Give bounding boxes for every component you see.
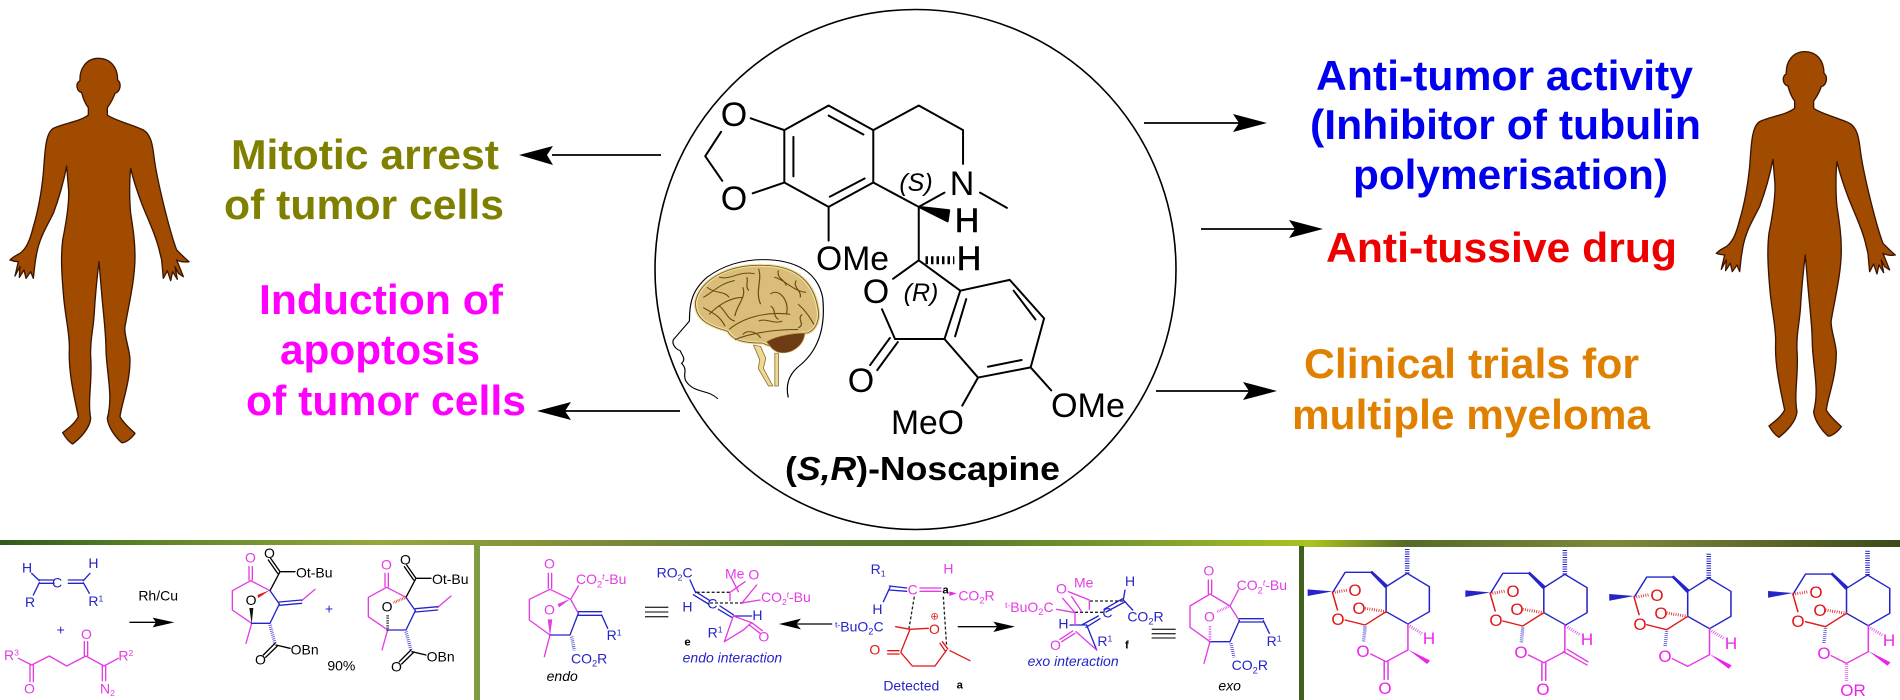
analogue 2: O — [1510, 600, 1524, 619]
allene reactant: R — [25, 594, 35, 610]
text: clinical trials: Clinical trials for — [1304, 340, 1639, 387]
diazo ketone reactant: 3 — [14, 647, 19, 657]
panel: endo exo mechanism — [480, 546, 1299, 700]
endo transition state e: C — [707, 596, 717, 612]
endo transition state e: -Bu — [789, 589, 811, 605]
text: mitotic arrest: Mitotic arrest — [231, 131, 499, 178]
text: anti-tussive drug: Anti-tussive drug — [1326, 224, 1677, 271]
product 2: O — [400, 552, 411, 568]
intermediate a: ⊕ — [930, 611, 939, 622]
molecule labels: MeO — [891, 404, 964, 442]
analogue 1: O — [1352, 599, 1366, 618]
CO2R, arrow to exo and label a — [949, 588, 1015, 692]
molecule labels: O — [721, 96, 747, 134]
intermediate a: Detected — [883, 678, 939, 694]
molecule labels: N — [950, 165, 974, 203]
endo transition state e: Me — [725, 566, 745, 582]
analogue 2: H — [1581, 630, 1593, 649]
endo product: 2 — [592, 659, 597, 669]
text: anti-tumor activity: Anti-tumor activity — [1316, 52, 1694, 99]
CO2R, arrow to exo and label a: 2 — [979, 596, 985, 606]
endo product: t — [602, 571, 605, 581]
exo product: R — [1267, 633, 1277, 649]
molecule labels: O — [848, 362, 874, 400]
molecule labels: OMe — [816, 240, 889, 278]
product 1: O — [255, 652, 266, 668]
allene reactant: C — [52, 574, 62, 590]
plus and yield: 90% — [327, 657, 355, 673]
exo transition state f — [1005, 573, 1176, 669]
arrow: to anti-tussive — [1201, 220, 1323, 238]
exo transition state f: 1 — [1107, 633, 1112, 643]
exo product: -Bu — [1265, 577, 1287, 593]
molecule labels: (S) — [899, 169, 933, 197]
analogue 1: O — [1356, 642, 1370, 661]
text: anti-tumor activity: (Inhibitor of tubulin — [1310, 101, 1701, 148]
product 1: O — [246, 592, 257, 608]
analogue 4: O — [1809, 583, 1823, 602]
diazo ketone reactant: 2 — [110, 688, 115, 698]
panel: background green strip — [0, 540, 1900, 700]
endo product: endo — [547, 668, 578, 684]
exo product: CO — [1232, 657, 1253, 673]
panel: allene reaction — [0, 545, 474, 700]
exo transition state f: R — [1154, 608, 1164, 624]
product 1: OBn — [291, 642, 319, 658]
endo transition state e: H — [682, 598, 692, 614]
endo transition state e — [657, 564, 811, 665]
arrow: to apoptosis — [537, 402, 680, 420]
endo product: O — [544, 601, 555, 617]
text: induction of apoptosis: of tumor cells — [246, 377, 526, 424]
diazo ketone reactant: O — [24, 680, 35, 696]
exo product — [1190, 562, 1287, 694]
endo product: 2 — [597, 579, 602, 589]
plus and yield — [325, 600, 355, 673]
allene reactant: R — [88, 593, 98, 609]
icon: head with brain — [673, 260, 823, 399]
exo transition state f: t- — [1005, 600, 1010, 610]
endo product: R — [597, 650, 607, 666]
exo product: O — [1203, 562, 1214, 578]
arrow to endo — [779, 619, 832, 629]
analogue 4: H — [1883, 631, 1895, 650]
exo transition state f: C — [1043, 599, 1054, 615]
reaction arrow Rh/Cu — [130, 588, 178, 627]
endo transition state e: CO — [761, 589, 782, 605]
endo transition state e: RO — [657, 564, 678, 580]
text: mitotic arrest — [224, 131, 504, 228]
endo product: R — [607, 627, 617, 643]
product 2: O — [391, 658, 402, 674]
molecule labels — [721, 96, 1125, 442]
text: mitotic arrest: of tumor cells — [224, 181, 504, 228]
analogue 2 — [1465, 549, 1593, 699]
exo transition state f: 2 — [1148, 616, 1154, 626]
allene reactant: 1 — [98, 593, 103, 603]
intermediate a: H — [872, 601, 882, 617]
CO2R, arrow to exo and label a: a — [957, 680, 964, 692]
exo product: t — [1263, 577, 1266, 587]
exo transition state f: R — [1097, 633, 1107, 649]
analogue 2: O — [1489, 611, 1503, 630]
molecule labels: O — [863, 273, 889, 311]
analogue 1: O — [1348, 581, 1362, 600]
analogue 3: H — [1725, 634, 1737, 653]
analogue 2: O — [1514, 643, 1528, 662]
analogue 1: O — [1331, 610, 1345, 629]
endo transition state e: endo interaction — [683, 649, 782, 665]
exo product: exo — [1218, 678, 1241, 694]
analogue 3: O — [1633, 615, 1647, 634]
molecule labels: H — [955, 202, 979, 240]
exo product: CO — [1237, 577, 1258, 593]
exo product: 1 — [1277, 633, 1282, 643]
text: anti-tumor activity: polymerisation) — [1353, 151, 1668, 198]
analogue 3: O — [1650, 586, 1664, 605]
product 2 — [368, 552, 469, 674]
exo transition state f: exo interaction — [1028, 653, 1119, 669]
product 1: O — [264, 545, 275, 561]
product 1: Ot-Bu — [296, 564, 333, 580]
endo transition state e: e — [684, 636, 691, 648]
exo transition state f: O — [1050, 637, 1061, 653]
exo transition state f: 2 — [1038, 607, 1043, 617]
product 1: O — [245, 550, 256, 566]
arrow: to anti-tumor — [1144, 114, 1267, 132]
diazo ketone reactant: 2 — [128, 648, 133, 658]
analogue 1: H — [1423, 629, 1435, 648]
allene reactant: + — [57, 621, 65, 637]
intermediate a: 2 — [868, 626, 873, 636]
endo transition state e: O — [748, 566, 759, 582]
molecule labels: (R) — [904, 279, 938, 307]
endo product — [529, 555, 668, 684]
exo transition state f: O — [1056, 580, 1067, 596]
exo transition state f: H — [1125, 573, 1135, 589]
analogue 3 — [1609, 553, 1737, 669]
intermediate a: R — [871, 561, 881, 577]
analogue 1 — [1308, 548, 1435, 698]
endo transition state e: H — [752, 607, 762, 623]
exo product: O — [1204, 608, 1215, 624]
allene reactant — [22, 555, 103, 637]
analogue 4: O — [1791, 612, 1805, 631]
arrow: to mitotic arrest — [519, 146, 661, 165]
text: clinical trials: multiple myeloma — [1292, 391, 1651, 438]
product 2: OBn — [427, 648, 455, 664]
endo product: O — [544, 555, 555, 571]
exo transition state f: BuO — [1010, 599, 1038, 615]
molecule labels: OMe — [1051, 387, 1125, 425]
molecule labels: O — [721, 180, 747, 218]
product 2: O — [381, 556, 392, 572]
analogue 4: O — [1813, 601, 1827, 620]
intermediate a: O — [929, 621, 940, 637]
exo product: 2 — [1253, 665, 1258, 675]
exo product: R — [1258, 657, 1268, 673]
product 2: Ot-Bu — [432, 571, 469, 587]
endo product: CO — [576, 571, 597, 587]
endo transition state e: R — [708, 624, 718, 640]
arrow: to clinical trials — [1156, 382, 1277, 400]
exo transition state f: CO — [1127, 608, 1148, 624]
diazo ketone reactant: O — [81, 626, 92, 642]
endo product: CO — [571, 650, 592, 666]
text: induction of apoptosis: apoptosis — [280, 326, 480, 373]
intermediate a: C — [873, 618, 884, 634]
intermediate a: 1 — [881, 569, 886, 579]
endo product: 1 — [617, 627, 622, 637]
analogue 4 — [1768, 550, 1895, 700]
exo transition state f: H — [1058, 616, 1068, 632]
diazo ketone reactant: R — [4, 647, 14, 663]
reaction arrow Rh/Cu: Rh/Cu — [138, 588, 178, 604]
intermediate a: a — [942, 584, 949, 596]
product 2: O — [382, 599, 393, 615]
text: induction of apoptosis: Induction of — [259, 276, 504, 323]
title: (S,R)-Noscapine: (S,R)-Noscapine — [785, 451, 1060, 488]
text: clinical trials — [1292, 340, 1651, 438]
product 1 — [232, 545, 333, 668]
endo transition state e: 2 — [678, 572, 683, 582]
exo transition state f: C — [1102, 604, 1112, 620]
endo transition state e: C — [682, 564, 693, 580]
endo transition state e: 1 — [718, 625, 723, 635]
CO2R, arrow to exo and label a: R — [985, 588, 995, 604]
exo transition state f: f — [1125, 640, 1129, 652]
analogue 4: O — [1817, 644, 1831, 663]
endo transition state e: 2 — [782, 597, 787, 607]
text: anti-tumor activity — [1310, 52, 1701, 198]
text: induction of apoptosis — [246, 276, 526, 424]
cerebellum — [767, 333, 805, 353]
intermediate a: t- — [835, 619, 840, 629]
brain stem — [753, 345, 778, 386]
icon: human figure left — [10, 58, 189, 444]
molecule labels: H — [957, 240, 981, 278]
icon: human figure right — [1716, 52, 1895, 437]
endo product: -Bu — [605, 571, 626, 587]
panel: central circle — [655, 10, 1176, 530]
allene reactant: H — [22, 560, 32, 576]
exo product: 2 — [1258, 585, 1263, 595]
analogue 1: O — [1378, 679, 1392, 698]
analogue 2: O — [1536, 680, 1550, 699]
endo transition state e: t — [787, 591, 790, 600]
exo transition state f: Me — [1074, 574, 1094, 590]
intermediate a: C — [908, 582, 918, 598]
analogue 3: O — [1658, 647, 1672, 666]
panel: artemisinin analogues — [1304, 547, 1900, 700]
intermediate a: O — [869, 642, 880, 658]
endo transition state e: O — [758, 628, 769, 644]
molecule: noscapine structure — [705, 96, 1125, 442]
intermediate a: H — [943, 560, 953, 576]
plus and yield: + — [325, 600, 333, 616]
diazo ketone reactant — [4, 626, 133, 698]
allene reactant: H — [88, 555, 98, 571]
diazo ketone reactant: N — [100, 680, 110, 696]
analogue 2: O — [1506, 582, 1520, 601]
analogue 4: OR — [1840, 681, 1866, 700]
intermediate a — [835, 560, 953, 694]
analogue 3: O — [1654, 604, 1668, 623]
diazo ketone reactant: R — [118, 648, 128, 664]
CO2R, arrow to exo and label a: CO — [958, 588, 979, 604]
intermediate a: BuO — [840, 618, 868, 634]
